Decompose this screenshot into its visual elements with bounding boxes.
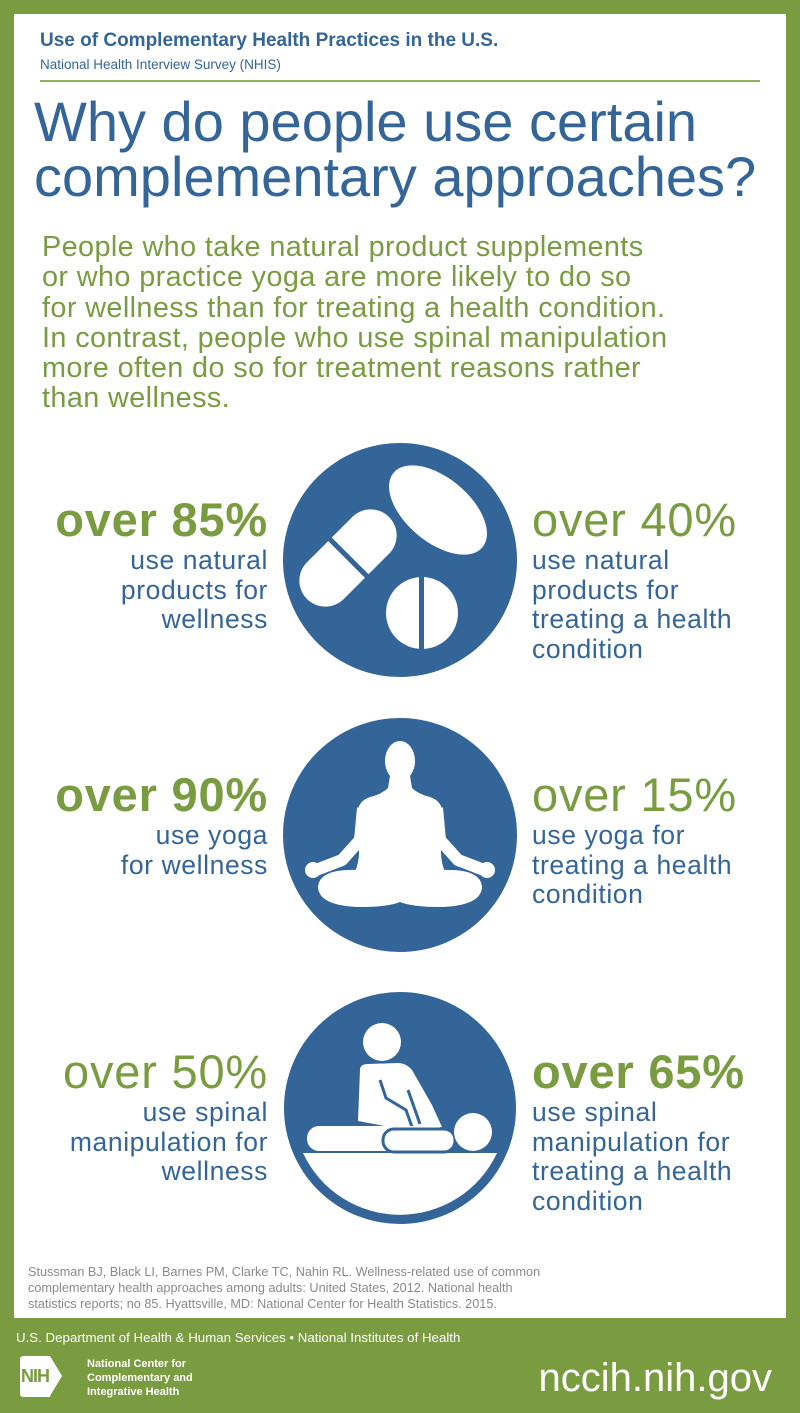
main heading: complementary approaches? (34, 145, 756, 208)
NIH logo: National Center for (87, 1358, 186, 1370)
intro paragraph (42, 231, 668, 414)
row: yoga right: over 15% (532, 768, 737, 821)
row: spinal right: use spinal (532, 1097, 657, 1127)
row: yoga right: treating a health (532, 850, 732, 880)
row: spinal left: manipulation for (70, 1126, 268, 1156)
row: yoga left: over 90% (55, 768, 268, 821)
row: yoga right (532, 768, 737, 909)
row: natural products right (532, 493, 737, 664)
intro paragraph: People who take natural product supplements (42, 231, 644, 263)
main heading (34, 90, 756, 208)
header subtitle: National Health Interview Survey (NHIS) (40, 57, 281, 72)
row: spinal right (532, 1045, 745, 1216)
NIH logo: Integrative Health (87, 1386, 179, 1398)
row: spinal right: manipulation for (532, 1126, 730, 1156)
website: nccih.nih.gov (539, 1356, 772, 1400)
row: spinal left: wellness (162, 1156, 268, 1186)
row: spinal right: treating a health (532, 1156, 732, 1186)
citation: statistics reports; no 85. Hyattsville, MD: National Center for Health Statistics. 2015. (28, 1297, 497, 1311)
row: natural products right: treating a health (532, 604, 732, 634)
row: natural products left: wellness (162, 604, 268, 634)
row: natural products right: over 40% (532, 493, 737, 546)
row: yoga left: use yoga (156, 820, 268, 850)
NIH logo (20, 1356, 193, 1398)
intro paragraph: for wellness than for treating a health condition. (42, 292, 666, 324)
row: spinal left: use spinal (143, 1097, 268, 1127)
row: spinal left: over 50% (63, 1045, 268, 1098)
NIH logo: NIH (21, 1366, 49, 1386)
intro paragraph: In contrast, people who use spinal manipulation (42, 322, 668, 354)
citation: Stussman BJ, Black LI, Barnes PM, Clarke TC, Nahin RL. Wellness-related use of common (28, 1265, 540, 1279)
row: yoga left (55, 768, 268, 880)
header title: Use of Complementary Health Practices in the U.S. (40, 30, 498, 51)
intro paragraph: or who practice yoga are more likely to do so (42, 261, 631, 293)
row: natural products right: use natural (532, 545, 670, 575)
row: spinal right: over 65% (532, 1045, 745, 1098)
row: natural products right: products for (532, 574, 679, 604)
row: yoga right: use yoga for (532, 820, 685, 850)
citation (28, 1265, 540, 1311)
citation: complementary health approaches among adults: United States, 2012. National health (28, 1281, 513, 1295)
row: yoga left: for wellness (121, 850, 268, 880)
row: spinal right: condition (532, 1186, 643, 1216)
row: natural products left: use natural (130, 545, 268, 575)
row: natural products left: products for (121, 574, 268, 604)
row: spinal left (63, 1045, 268, 1186)
row: yoga right: condition (532, 879, 643, 909)
intro paragraph: more often do so for treatment reasons rather (42, 352, 641, 384)
row: natural products left (55, 493, 268, 634)
footer agencies: U.S. Department of Health & Human Services • National Institutes of Health (16, 1330, 460, 1345)
row: natural products left: over 85% (55, 493, 268, 546)
NIH logo: Complementary and (87, 1372, 193, 1384)
intro paragraph: than wellness. (42, 382, 230, 414)
main heading: Why do people use certain (34, 90, 697, 153)
row: natural products right: condition (532, 634, 643, 664)
